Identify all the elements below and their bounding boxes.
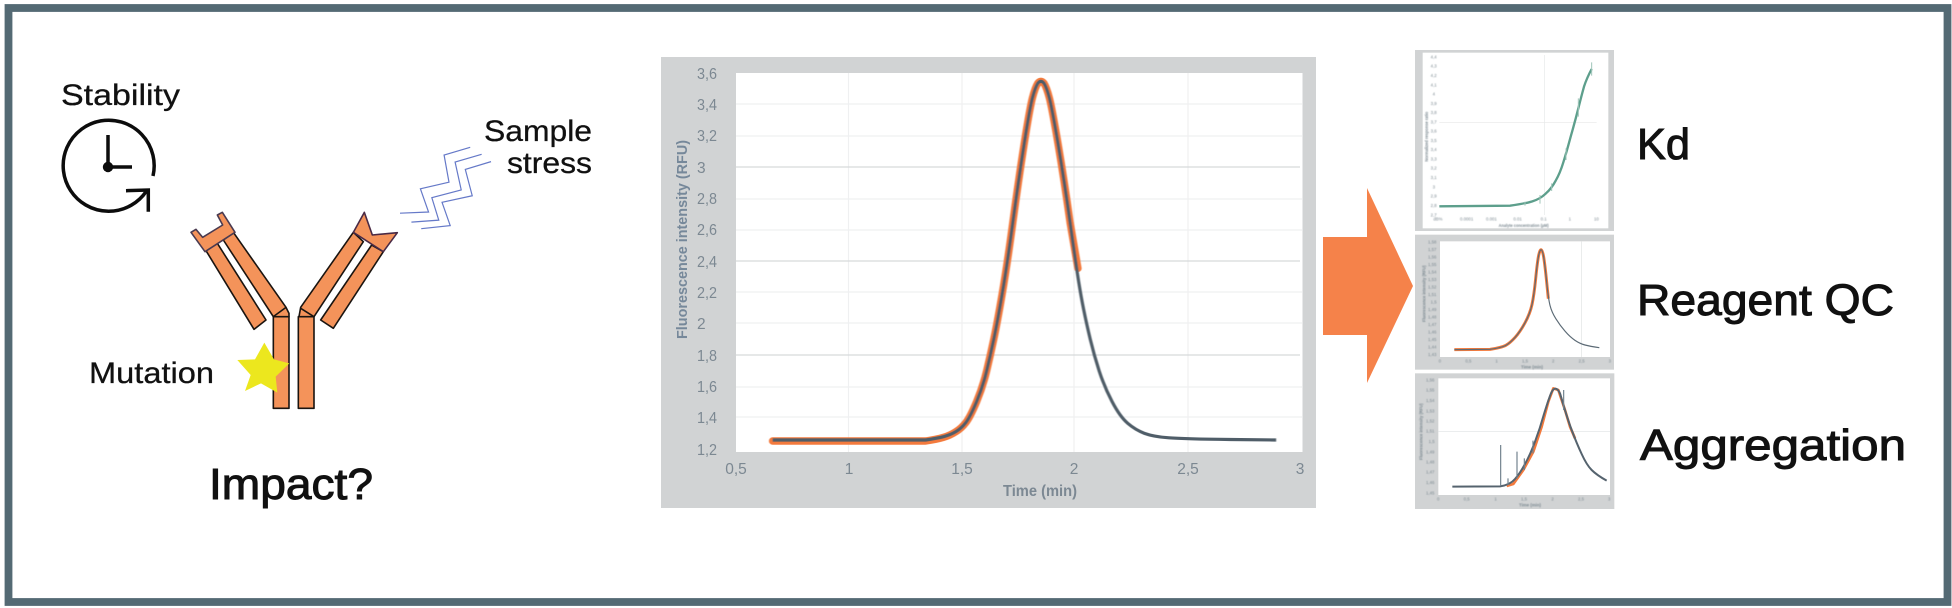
x axis tick labels <box>725 461 1304 478</box>
axis labels: 2,5 <box>1578 496 1585 501</box>
axis labels: 1,55 <box>1428 262 1437 267</box>
chart: main fluorescence peak <box>661 57 1316 508</box>
axis labels: 1 <box>1494 496 1497 501</box>
chart background <box>661 57 1316 508</box>
axis labels: 2 <box>1552 358 1555 363</box>
label: Sample stress <box>484 115 592 180</box>
axis labels: 3,1 <box>1431 175 1437 180</box>
Reagent QC curve <box>1454 250 1599 350</box>
plot area <box>1423 53 1608 228</box>
axis labels: 0,5 <box>1465 358 1472 363</box>
axis labels: 1,52 <box>1426 419 1435 424</box>
y axis tick labels: 1,4 <box>697 410 717 427</box>
axis labels: 4 <box>1433 92 1436 97</box>
axis labels: 3 <box>1433 184 1436 189</box>
axis labels: 1,5 <box>1521 496 1528 501</box>
label: Stability: Stability <box>61 79 180 112</box>
y axis tick labels: 3,4 <box>697 97 717 114</box>
axis labels: 0 <box>1439 358 1442 363</box>
axis labels: 3,7 <box>1431 119 1437 124</box>
Aggregation curve with spikes <box>1452 388 1607 487</box>
chart background <box>1415 373 1614 509</box>
y axis tick labels: 3,6 <box>697 66 717 83</box>
label: Mutation: Mutation <box>89 357 214 390</box>
y axis tick labels: 2,4 <box>697 254 717 271</box>
axis labels: 1,5 <box>1429 439 1435 444</box>
panel: Kd binding curve <box>1415 50 1614 231</box>
fluorescence curve <box>773 81 1276 441</box>
grid lines <box>736 73 1302 452</box>
x axis title: Time (min) <box>1003 483 1077 500</box>
y axis tick labels: 2,8 <box>697 191 717 208</box>
Kd curve <box>1439 62 1592 206</box>
panel: Aggregation curve <box>1415 373 1614 509</box>
axis labels: Fluorescence intensity (RFU) <box>1419 403 1424 460</box>
axis labels: 0.1 <box>1541 217 1547 222</box>
chart background <box>1415 50 1614 231</box>
axis labels: 1,49 <box>1428 307 1437 312</box>
axis labels: 1,51 <box>1426 429 1435 434</box>
axis labels: 1,45 <box>1428 337 1437 342</box>
y axis tick labels: 3 <box>697 160 706 177</box>
axis labels: 2,5 <box>1579 358 1585 363</box>
axis labels: 2,7 <box>1431 212 1437 217</box>
axis labels: Time (min) <box>1519 503 1542 508</box>
axis labels: 1 <box>1495 358 1498 363</box>
label: Reagent QC: Reagent QC <box>1637 276 1894 325</box>
axis labels: 0.01 <box>1513 217 1522 222</box>
axis labels: 1,49 <box>1426 449 1435 454</box>
axis labels: 3,2 <box>1431 166 1437 171</box>
icon: sample stress lightning lines <box>400 147 491 229</box>
y axis tick labels: 1,6 <box>697 379 717 396</box>
x axis tick labels: 2,5 <box>1177 461 1199 478</box>
axis labels: 3,4 <box>1431 147 1437 152</box>
axis labels: 0.0001 <box>1460 217 1474 222</box>
axis labels: 3 <box>1609 358 1612 363</box>
plot area <box>1440 241 1610 357</box>
grid lines <box>1439 55 1597 215</box>
y axis tick labels <box>697 66 717 459</box>
y axis tick labels: 2 <box>697 316 706 333</box>
axis labels: 4,1 <box>1431 82 1437 87</box>
axis labels: 2,8 <box>1431 203 1437 208</box>
axis labels <box>1421 240 1612 370</box>
axis labels: 1,46 <box>1426 480 1435 485</box>
axis labels: 1,55 <box>1426 388 1435 393</box>
axis labels: 0.001 <box>1486 217 1497 222</box>
y axis tick labels: 3,2 <box>697 128 717 145</box>
axis labels: 1,43 <box>1428 352 1437 357</box>
x axis tick labels: 1 <box>845 461 853 478</box>
label: Kd: Kd <box>1637 120 1690 169</box>
axis labels: 3,3 <box>1431 156 1437 161</box>
y axis tick labels: 2,2 <box>697 285 717 302</box>
axis labels: 3,5 <box>1431 138 1437 143</box>
panel: antibody and stress factors <box>61 79 592 509</box>
axis labels: 1,53 <box>1428 277 1437 282</box>
plot area <box>736 73 1302 452</box>
axis labels: 4,2 <box>1431 73 1437 78</box>
x axis tick labels: 0,5 <box>725 461 747 478</box>
axis labels: 1,52 <box>1428 285 1437 290</box>
axis labels: 1,45 <box>1426 490 1435 495</box>
y axis tick labels: 1,8 <box>697 348 717 365</box>
label: Sample stress: stress <box>507 147 592 180</box>
axis labels: 1,47 <box>1426 470 1435 475</box>
axis labels: 1,44 <box>1428 345 1437 350</box>
axis labels: 3,8 <box>1431 110 1437 115</box>
axis labels: 1,48 <box>1426 460 1435 465</box>
axis labels: 1,5 <box>1431 300 1437 305</box>
label: Sample stress: Sample <box>484 115 592 148</box>
axis labels: 2,9 <box>1431 194 1437 199</box>
axis labels: 0,5 <box>1464 496 1470 501</box>
x axis tick labels: 1,5 <box>951 461 973 478</box>
x axis tick labels: 2 <box>1070 461 1078 478</box>
axis labels: Analyte concentration (µM) <box>1499 223 1549 228</box>
plot area <box>1438 378 1610 495</box>
y axis tick labels: 2,6 <box>697 222 717 239</box>
axis labels: 4,3 <box>1431 64 1437 69</box>
axis labels <box>1424 54 1599 228</box>
chart background <box>1415 235 1614 370</box>
axis labels: 1,48 <box>1428 315 1437 320</box>
axis labels: 1,57 <box>1428 247 1437 252</box>
grid lines <box>1438 430 1610 432</box>
axis labels: 1,54 <box>1428 270 1437 275</box>
axis labels: 2 <box>1551 496 1554 501</box>
axis labels: 4,4 <box>1431 54 1437 59</box>
axis labels: 3,9 <box>1431 101 1437 106</box>
axis labels <box>1419 378 1611 508</box>
axis labels: 1,58 <box>1428 240 1437 245</box>
axis labels: 1,51 <box>1428 292 1437 297</box>
axis labels: 1,54 <box>1426 398 1435 403</box>
arrow: to applications <box>1323 188 1413 383</box>
label: Aggregation: Aggregation <box>1640 421 1906 470</box>
axis labels: Normalized response ratio <box>1424 111 1429 162</box>
axis labels: 1,5 <box>1522 358 1529 363</box>
y axis title: Fluorescence intensity (RFU) <box>675 140 691 339</box>
axis labels: 0 <box>1437 496 1440 501</box>
axis labels: Time (min) <box>1521 365 1544 370</box>
axis labels: dB% <box>1433 217 1443 222</box>
axis labels: 1 <box>1569 217 1572 222</box>
x axis tick labels: 3 <box>1296 461 1304 478</box>
heading: Impact?: Impact? <box>209 460 373 509</box>
icon: clock with rotating arrow <box>63 120 154 212</box>
axis labels: 1,46 <box>1428 330 1437 335</box>
axis labels: 1,56 <box>1428 255 1437 260</box>
grid lines <box>1581 241 1583 357</box>
icon: antibody <box>191 212 397 408</box>
axis labels: Fluorescence intensity (RFU) <box>1421 265 1426 322</box>
axis labels: 1,53 <box>1426 408 1435 413</box>
panel: Reagent QC curve <box>1415 235 1614 370</box>
axis labels: 3 <box>1608 496 1611 501</box>
icon: mutation star <box>237 343 289 393</box>
axis labels: 1,56 <box>1426 378 1435 383</box>
axis labels: 3,6 <box>1431 129 1437 134</box>
y axis tick labels: 1,2 <box>697 442 717 459</box>
axis labels: 1,47 <box>1428 322 1437 327</box>
axis labels: 10 <box>1594 217 1599 222</box>
